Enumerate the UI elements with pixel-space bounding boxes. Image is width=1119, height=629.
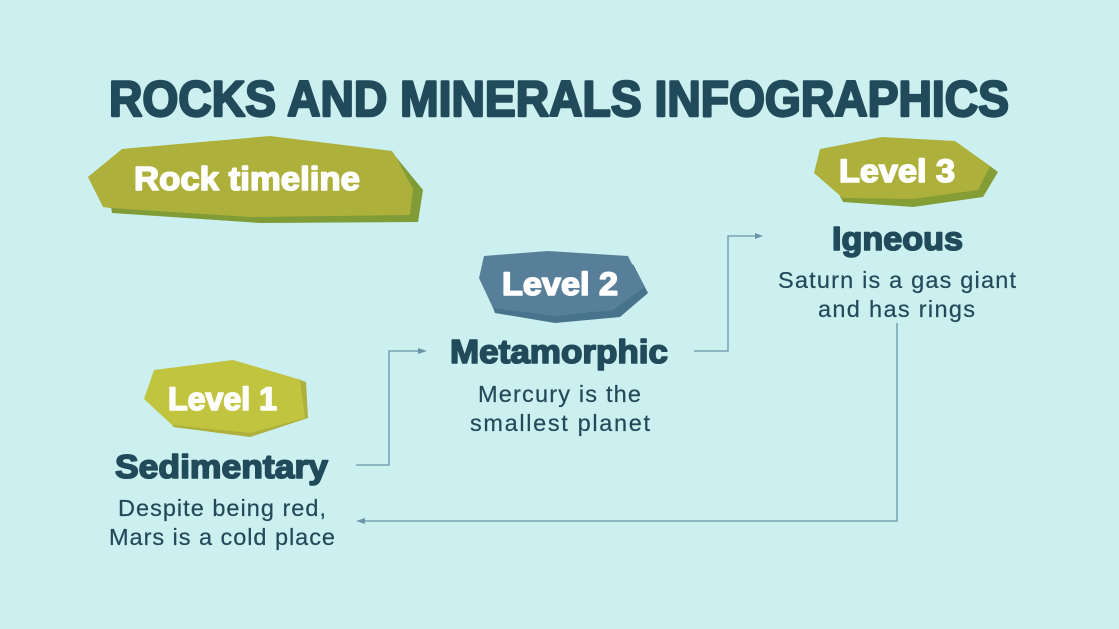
text: igneous description: Saturn is a gas giant <box>778 267 1016 293</box>
badge: level 2 <box>479 251 648 323</box>
text: metamorphic description <box>470 381 650 436</box>
badge: rock timeline <box>88 136 423 223</box>
text: sedimentary description: Mars is a cold place <box>109 524 335 550</box>
heading: sedimentary: Sedimentary <box>115 448 329 485</box>
badge: level 1 <box>144 360 308 437</box>
text: metamorphic description: Mercury is the <box>478 381 641 407</box>
heading: metamorphic: Metamorphic <box>450 333 668 370</box>
badge: level 3 <box>814 137 998 207</box>
badge: rock timeline: Rock timeline <box>134 160 360 197</box>
text: igneous description <box>778 267 1016 322</box>
badge: level 1: Level 1 <box>168 381 277 417</box>
text: sedimentary description: Despite being red, <box>118 495 326 521</box>
title: ROCKS AND MINERALS INFOGRAPHICS <box>109 71 1009 127</box>
badge: level 3: Level 3 <box>839 153 955 189</box>
text: sedimentary description <box>109 495 335 550</box>
arrow: level 2 to level 3 <box>694 233 763 351</box>
text: metamorphic description: smallest planet <box>470 410 650 436</box>
badge: level 2: Level 2 <box>502 266 618 302</box>
arrow: level 3 back to level 1 <box>356 323 897 524</box>
arrow: level 1 to level 2 <box>356 348 427 465</box>
text: igneous description: and has rings <box>818 296 975 322</box>
heading: igneous: Igneous <box>832 220 963 257</box>
